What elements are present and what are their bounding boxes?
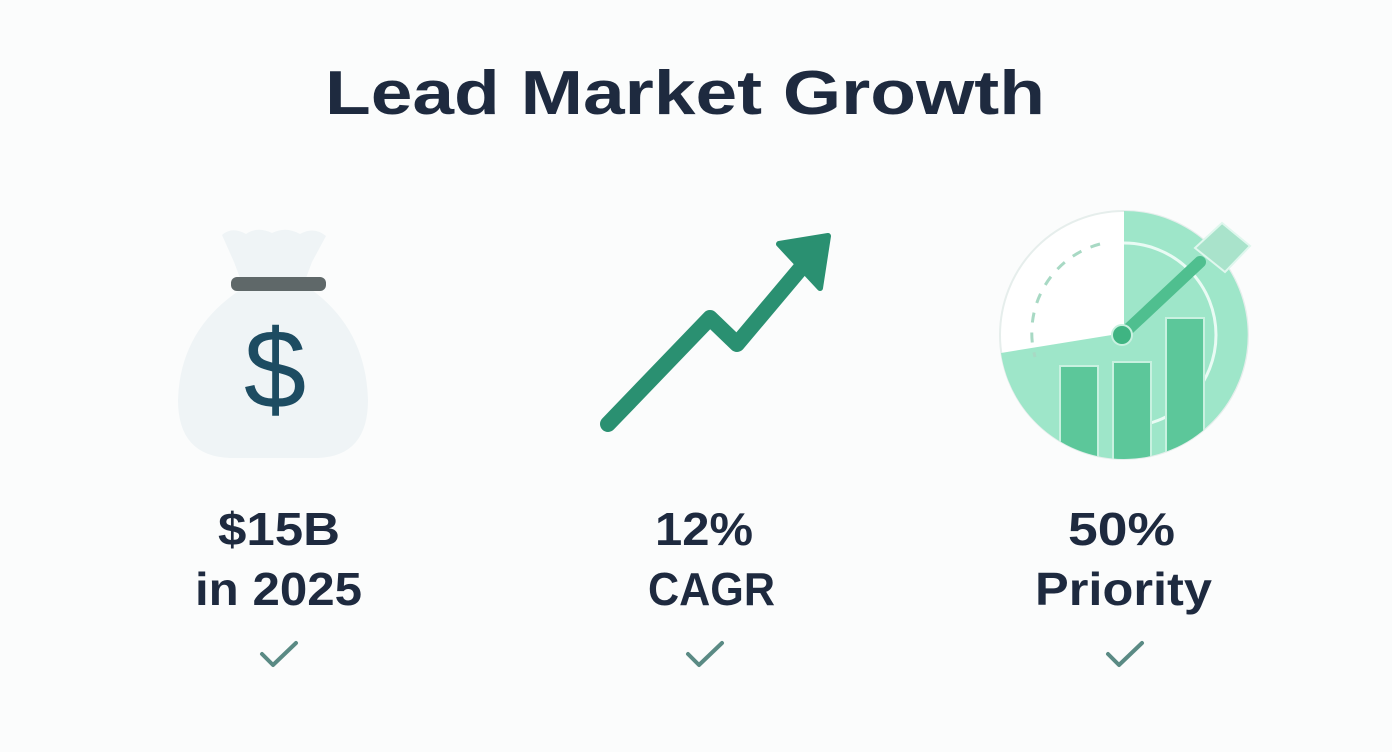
icon: priority gauge chart	[1000, 211, 1250, 466]
stat: 12% CAGR	[648, 503, 775, 615]
stat: 12% CAGR: CAGR	[648, 563, 775, 615]
icon: money bag	[178, 230, 368, 458]
icon: growth arrow	[608, 236, 828, 424]
title: Lead Market Growth	[325, 59, 1045, 128]
stat: $15B: in 2025	[195, 563, 362, 615]
icon: money bag: $	[244, 307, 306, 432]
stat: $15B	[195, 503, 362, 615]
stat: 50% Priority	[1035, 503, 1212, 615]
stat: $15B: $15B	[218, 503, 340, 555]
stat: 50% Priority: 50%	[1068, 503, 1175, 555]
stat: 50% Priority: Priority	[1035, 563, 1212, 615]
icon: checkmarks	[262, 643, 1142, 665]
stat: 12% CAGR: 12%	[655, 503, 753, 555]
